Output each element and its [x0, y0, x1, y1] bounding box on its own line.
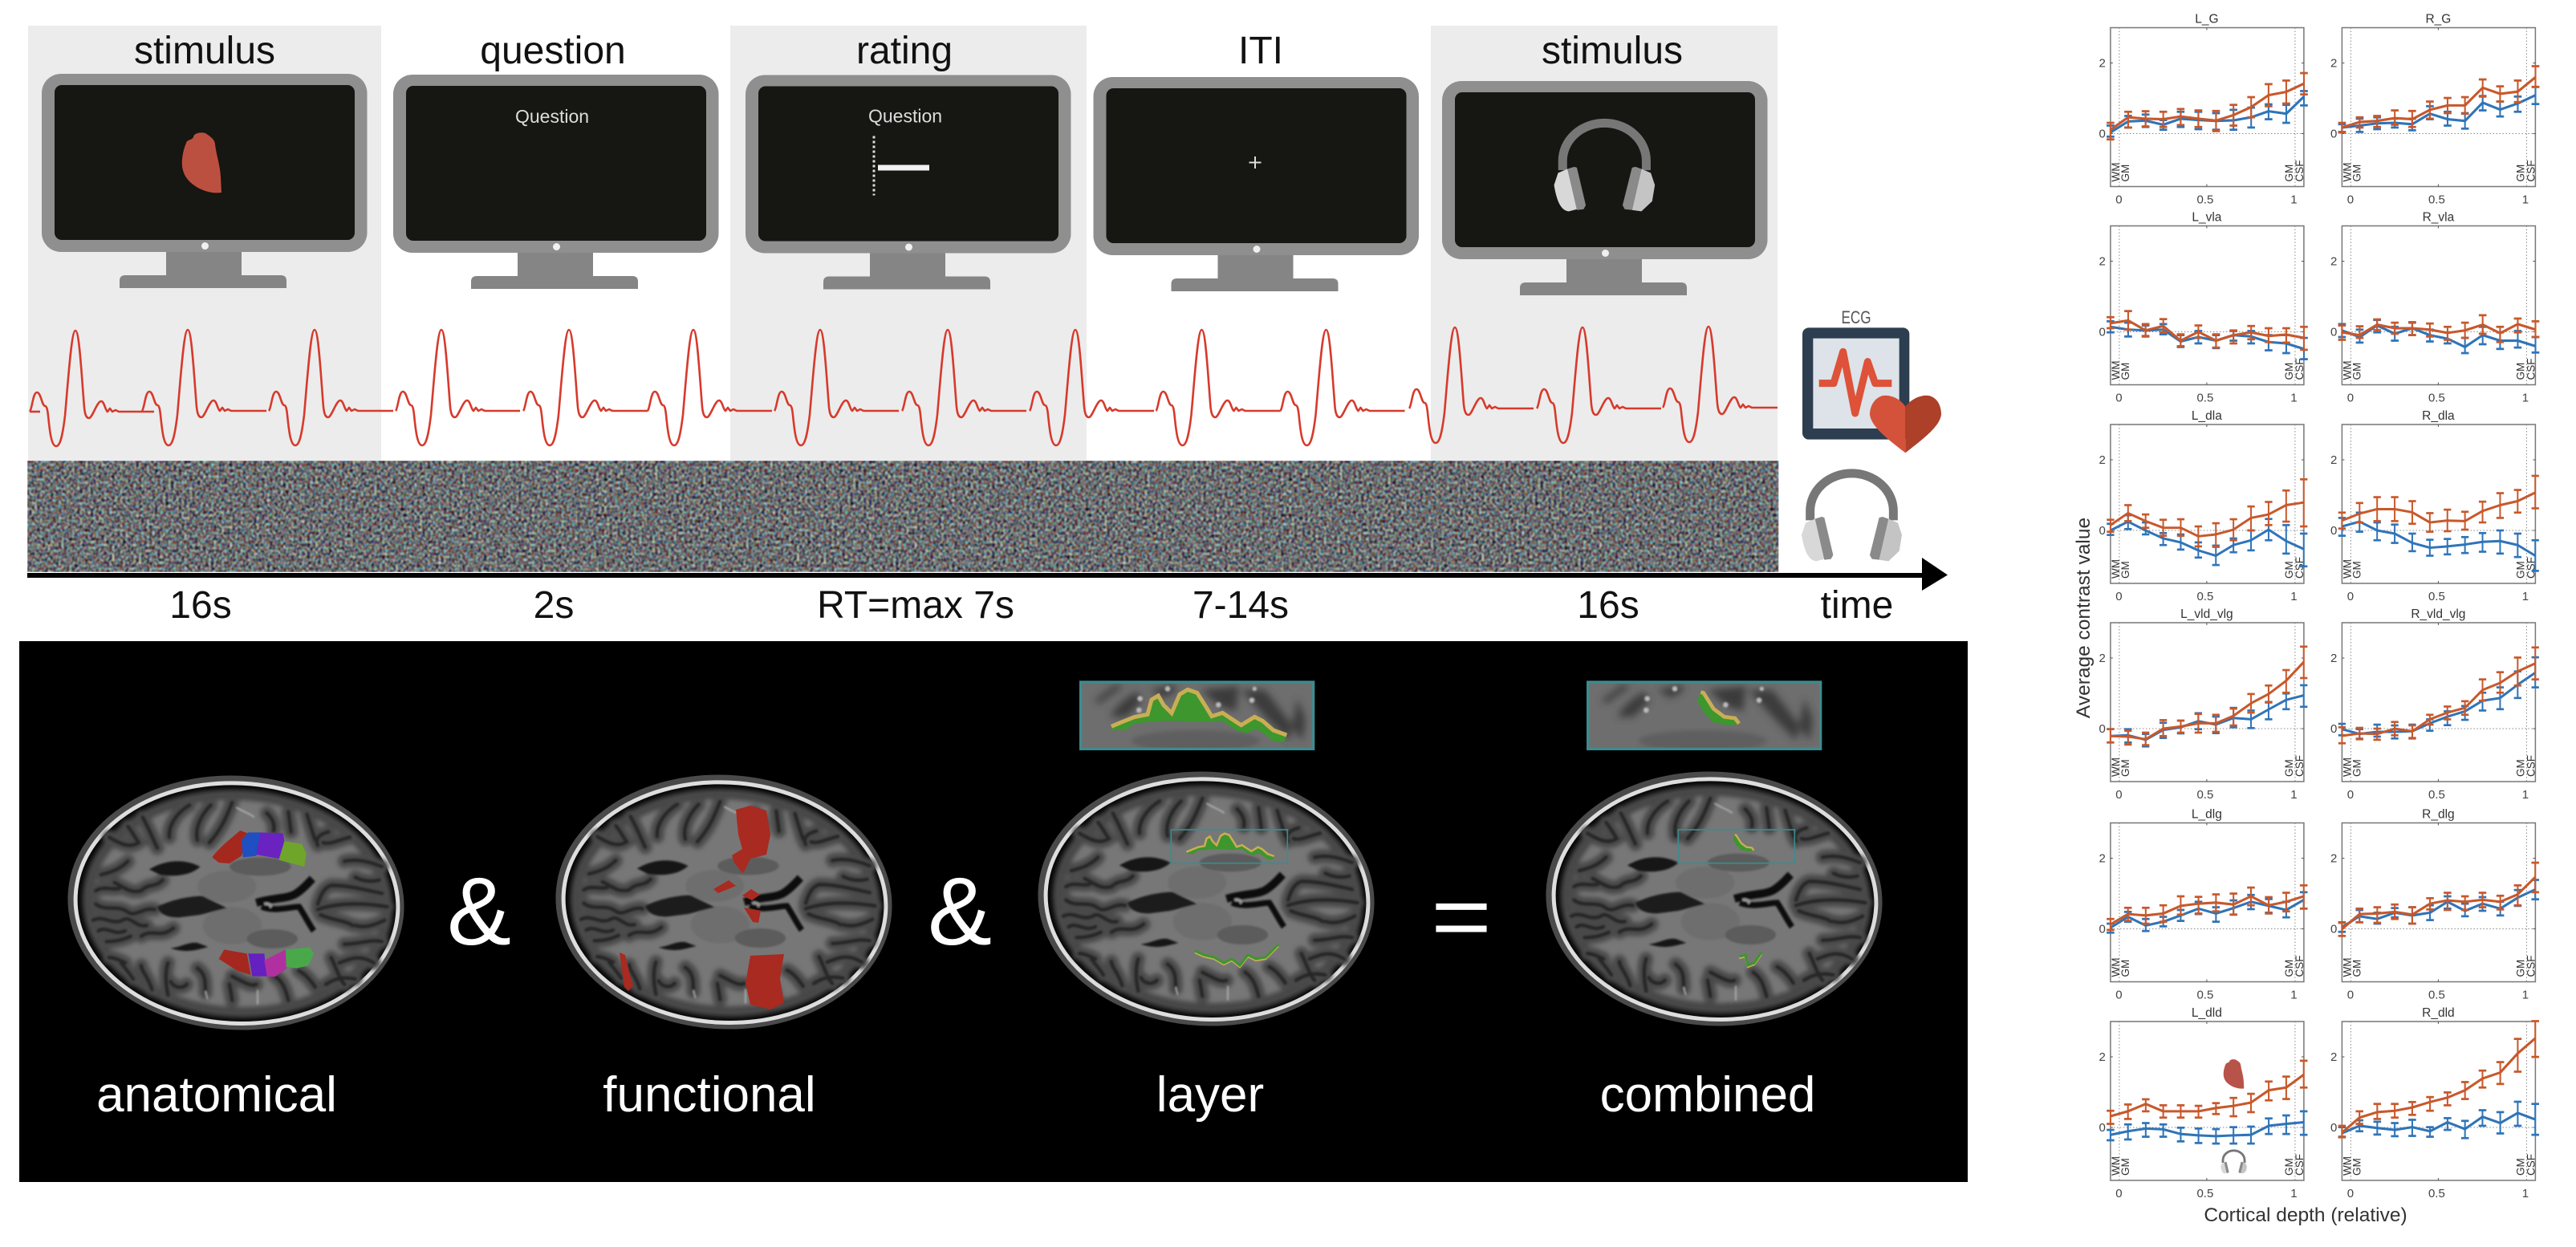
plot: R_dlg: R_dlg [2422, 807, 2455, 822]
plot: L_G: WM [2110, 162, 2122, 181]
panel: second stimulus phase background [1431, 26, 1778, 461]
plot: L_vla: WM [2110, 361, 2122, 380]
plot: R_dlg: WM [2341, 958, 2353, 977]
symbol: equals: = [1431, 867, 1492, 966]
plot: R_dlg: 1 [2522, 989, 2529, 1001]
plot: L_dlg [2099, 807, 2306, 1001]
plot: R_dlg: GM [2350, 960, 2363, 977]
plot: L_G: CSF [2294, 160, 2306, 181]
label: layer: layer [1156, 1067, 1264, 1123]
label: anatomical: anatomical [96, 1067, 337, 1123]
plot: L_vla [2099, 210, 2306, 404]
plot: R_dld [2330, 1006, 2537, 1200]
plot: R_vla: WM [2341, 361, 2353, 380]
plot: L_dla: GM [2283, 561, 2295, 579]
plot: L_dla: 0.5 [2196, 590, 2213, 603]
plot: L_vld_vlg: 2 [2099, 652, 2106, 665]
panel: stimulus phase background [28, 26, 381, 461]
plot: L_vla: L_vla [2192, 210, 2222, 225]
plot: L_dld: WM [2110, 1156, 2122, 1176]
icon: ECG monitor with heart [1802, 307, 1941, 453]
label: RT=max 7s: RT=max 7s [817, 584, 1014, 627]
monitor: fixation cross screen [1093, 77, 1419, 291]
plot: R_G: CSF [2525, 160, 2537, 181]
plot: R_dld: WM [2341, 1156, 2353, 1176]
plot: L_dla: 0 [2099, 524, 2106, 538]
plot: L_G: 1 [2290, 193, 2298, 207]
plot: R_G: GM [2514, 165, 2526, 181]
label: 16s: 16s [169, 584, 232, 627]
plot: L_vla: 0 [2099, 326, 2106, 339]
plot: R_vld_vlg: 1 [2522, 788, 2529, 802]
plot: R_vld_vlg [2330, 607, 2537, 802]
monitor: rating screen [746, 75, 1071, 289]
plot: L_vld_vlg: 0 [2099, 722, 2106, 736]
plot: L_G: GM [2283, 165, 2295, 181]
plot: R_vla: GM [2514, 363, 2526, 380]
plot: R_dla: 1 [2522, 590, 2529, 603]
plot: L_dla: GM [2119, 561, 2131, 579]
plot: L_vld_vlg: WM [2110, 758, 2122, 777]
plot: L_dlg: L_dlg [2192, 807, 2222, 822]
label: time: time [1821, 584, 1893, 627]
plot: L_vla: 2 [2099, 255, 2106, 268]
plot: L_G: GM [2119, 165, 2131, 181]
plot: L_dld: 0 [2115, 1187, 2123, 1200]
plot: L_vld_vlg: 1 [2290, 788, 2298, 802]
plot: R_vla: CSF [2525, 358, 2537, 380]
chart: ECG trace [30, 327, 1787, 446]
plot: L_dla: CSF [2294, 557, 2306, 579]
plot: R_dla: 2 [2330, 453, 2337, 467]
panel: ROI definition black background [19, 641, 1968, 1182]
brain: combined ROI [1544, 682, 1884, 1030]
label: 2s: 2s [534, 584, 574, 627]
plot: R_dla: GM [2350, 561, 2363, 579]
plot: R_vla: 0.5 [2428, 392, 2445, 404]
plot: L_vla: CSF [2294, 358, 2306, 380]
plot: R_dld: R_dld [2422, 1006, 2455, 1020]
monitor: rating screen: Question [868, 106, 942, 127]
plot: R_dld: 2 [2330, 1050, 2337, 1064]
plot: L_vld_vlg: L_vld_vlg [2180, 607, 2233, 621]
plot: R_dla: 0 [2347, 590, 2354, 603]
plot: L_vld_vlg: 0.5 [2196, 788, 2213, 802]
plot: R_G [2330, 13, 2537, 207]
plot: R_dlg: 0 [2330, 923, 2337, 936]
plot: L_G: 2 [2099, 56, 2106, 71]
plot: L_dlg: 0 [2099, 923, 2106, 936]
plot: L_dlg: GM [2283, 960, 2295, 977]
plot: R_G: 1 [2522, 193, 2529, 207]
plot: R_dld: GM [2350, 1158, 2363, 1176]
heading: stimulus 2: stimulus [1542, 30, 1683, 72]
monitor: heart stimulus [42, 74, 368, 288]
plot: R_dld: 0 [2330, 1121, 2337, 1135]
plot: R_dla [2330, 409, 2537, 603]
plot: R_vld_vlg: GM [2514, 759, 2526, 777]
plot: L_dlg: 2 [2099, 852, 2106, 865]
axis label: Average contrast value: Average contrast value [2073, 518, 2095, 718]
plot: L_vld_vlg: CSF [2294, 755, 2306, 777]
plot: R_dld: 1 [2522, 1187, 2529, 1200]
plot: R_vla [2330, 210, 2537, 404]
plot: L_dld [2099, 1006, 2306, 1200]
plot: R_vld_vlg: R_vld_vlg [2411, 607, 2465, 621]
plot: L_dlg: CSF [2294, 955, 2306, 977]
plot: R_vld_vlg: CSF [2525, 755, 2537, 777]
plot: R_dla: R_dla [2422, 409, 2455, 423]
icon: headphones [1802, 473, 1902, 561]
plot: L_dld: 2 [2099, 1050, 2106, 1064]
plot: L_vla: 0.5 [2196, 392, 2213, 404]
plot: R_vld_vlg: 0 [2347, 788, 2354, 802]
plot: R_G: WM [2341, 162, 2353, 181]
axis label: Cortical depth: Cortical depth (relative) [2204, 1204, 2407, 1226]
plot: L_dlg: GM [2119, 960, 2131, 977]
plot: R_dld: 0 [2347, 1187, 2354, 1200]
plot: R_dlg: 0.5 [2428, 989, 2445, 1001]
monitor: question screen: Question [515, 106, 589, 127]
label: combined: combined [1600, 1067, 1815, 1123]
plot: R_G: 0 [2330, 127, 2337, 141]
monitor: question screen [393, 75, 719, 289]
plot: L_vla: GM [2283, 363, 2295, 380]
plot: R_vla: 2 [2330, 255, 2337, 268]
plot: L_dld: GM [2283, 1158, 2295, 1176]
plot: R_vla: 0 [2330, 326, 2337, 339]
brain: layer ROI [1036, 682, 1376, 1030]
plot: L_G: 0 [2099, 127, 2106, 141]
plot: L_dla: 0 [2115, 590, 2123, 603]
plot: L_dla: 2 [2099, 453, 2106, 467]
heading: question: question [480, 30, 626, 72]
panel: rating phase background [730, 26, 1087, 461]
plot: L_vla: GM [2119, 363, 2131, 380]
plot: R_G: 0.5 [2428, 193, 2445, 207]
label: 7-14s: 7-14s [1193, 584, 1289, 627]
symbol: ampersand 2: & [928, 858, 992, 965]
plot: L_dlg: WM [2110, 958, 2122, 977]
plot: R_vla: 0 [2347, 392, 2354, 404]
plot: R_dla: 0.5 [2428, 590, 2445, 603]
label: 16s second: 16s [1577, 584, 1639, 627]
brain: anatomical ROI [66, 772, 406, 1034]
heading: rating: rating [856, 30, 953, 72]
plot: R_vla: GM [2350, 363, 2363, 380]
plot: R_G: 0 [2347, 193, 2354, 207]
plot: R_dla: GM [2514, 561, 2526, 579]
plot: L_dla: L_dla [2192, 409, 2222, 423]
plot: R_G: R_G [2425, 13, 2451, 26]
arrow: time axis [27, 558, 1948, 591]
symbol: ampersand 1: & [447, 858, 511, 965]
plot: L_G: L_G [2195, 13, 2219, 26]
plot: R_dlg [2330, 807, 2537, 1001]
plot: L_dld: 0 [2099, 1121, 2106, 1135]
plot: R_vld_vlg: 0.5 [2428, 788, 2445, 802]
plot: R_vld_vlg: 2 [2330, 652, 2337, 665]
plot: R_dld: 0.5 [2428, 1187, 2445, 1200]
plot: L_vld_vlg: 0 [2115, 788, 2123, 802]
plot: R_dld: GM [2514, 1158, 2526, 1176]
brain: functional ROI [554, 771, 894, 1033]
plot: L_G: 0.5 [2196, 193, 2213, 207]
plot: R_vld_vlg: GM [2350, 759, 2363, 777]
plot: L_vld_vlg: GM [2283, 759, 2295, 777]
plot: R_vla: 1 [2522, 392, 2529, 404]
plot: R_dla: WM [2341, 559, 2353, 579]
heading: stimulus: stimulus [134, 30, 275, 72]
monitor: headphones stimulus [1442, 81, 1767, 295]
plot: L_vla: 1 [2290, 392, 2298, 404]
plot: R_vla: R_vla [2423, 210, 2455, 225]
plot: L_dld: 1 [2290, 1187, 2298, 1200]
plot: L_dla: 1 [2290, 590, 2298, 603]
icon: heart in L_dld plot [2224, 1059, 2244, 1089]
heading: ITI: ITI [1238, 30, 1283, 72]
plot: R_dla: CSF [2525, 557, 2537, 579]
icon: headphones in L_dld plot [2220, 1151, 2247, 1173]
plot: L_dlg: 0 [2115, 989, 2123, 1001]
plot: L_G: 0 [2115, 193, 2123, 207]
plot: L_dla: WM [2110, 559, 2122, 579]
plot: L_vla: 0 [2115, 392, 2123, 404]
plot: L_G [2099, 13, 2306, 207]
chart: scanner noise band [27, 461, 1778, 572]
plot: R_vld_vlg: 0 [2330, 722, 2337, 736]
icon: ECG monitor with heart: ECG [1841, 307, 1871, 327]
plot: L_dld: L_dld [2192, 1006, 2222, 1020]
plot: L_dld: GM [2119, 1158, 2131, 1176]
plot: L_vld_vlg [2099, 607, 2306, 802]
plot: L_dlg: 0.5 [2196, 989, 2213, 1001]
label: functional: functional [603, 1067, 816, 1123]
plot: R_dlg: 0 [2347, 989, 2354, 1001]
plot: R_vld_vlg: WM [2341, 758, 2353, 777]
plot: R_G: 2 [2330, 56, 2337, 71]
plot: R_dlg: 2 [2330, 852, 2337, 865]
plot: R_dld: CSF [2525, 1154, 2537, 1176]
plot: R_dlg: CSF [2525, 955, 2537, 977]
plot: L_dld: 0.5 [2196, 1187, 2213, 1200]
plot: L_dlg: 1 [2290, 989, 2298, 1001]
plot: L_dld: CSF [2294, 1154, 2306, 1176]
plot: L_dla [2099, 409, 2306, 603]
plot: R_dla: 0 [2330, 524, 2337, 538]
plot: R_G: GM [2350, 165, 2363, 181]
plot: L_vld_vlg: GM [2119, 759, 2131, 777]
plot: R_dlg: GM [2514, 960, 2526, 977]
